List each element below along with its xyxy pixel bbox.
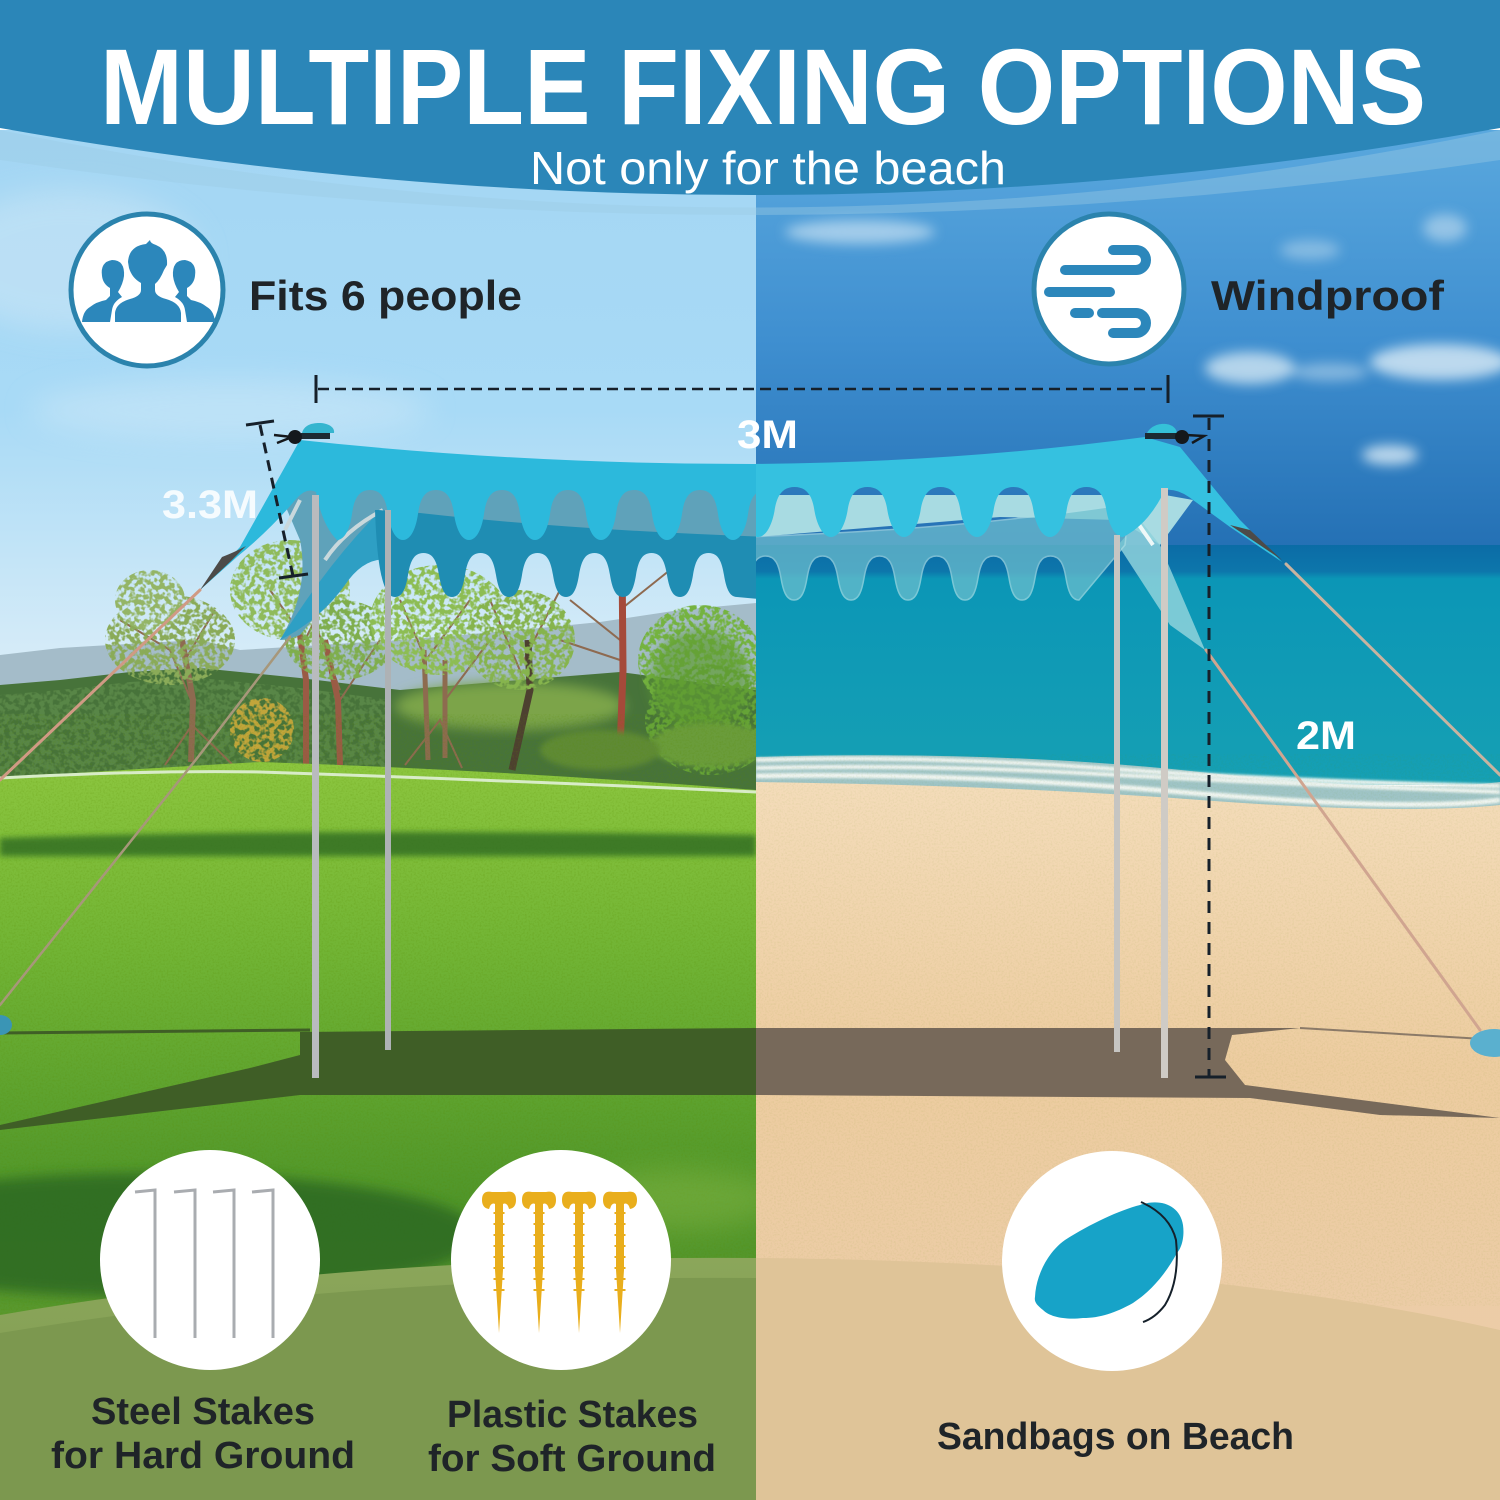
canopy top: grass half (200, 440, 799, 590)
canopy top: beach half (756, 437, 1282, 562)
subtitle: Not only for the beach (530, 142, 1006, 194)
label: 3M: 3M (737, 413, 798, 457)
accessory: plastic stakes (428, 1150, 716, 1480)
trees (80, 540, 775, 780)
tree shadow on grass (0, 832, 756, 856)
dimension: depth 3.3M (246, 421, 308, 578)
dimension: height 2M (1193, 416, 1226, 1077)
guy ropes (0, 564, 1500, 1030)
accessory: sandbag (937, 1151, 1294, 1458)
tent top fittings (274, 423, 1204, 444)
label: Sandbags on Beach (937, 1416, 1294, 1458)
feature: windproof (1034, 214, 1445, 364)
tent canopy (200, 437, 1282, 650)
left sky (0, 130, 756, 690)
icon: wind (1034, 214, 1184, 364)
panel: golf course scene (0, 130, 756, 1315)
canopy shadow on sand (756, 1028, 1500, 1118)
dimension: width 3M (316, 375, 1168, 403)
tent corner tips (200, 525, 1282, 590)
label: Fits 6 people (249, 272, 522, 319)
right sky (756, 130, 1500, 550)
surf (756, 755, 1500, 815)
canopy shadow on grass (0, 1028, 756, 1130)
bottom ground strip: left (0, 1258, 756, 1500)
label: for Soft Ground (428, 1438, 716, 1480)
sea (756, 545, 1500, 785)
sand (756, 782, 1500, 1330)
bottom ground strip: right (756, 1258, 1500, 1500)
feature: fits 6 people (71, 214, 522, 366)
canopy back and underside: beach half (737, 495, 1205, 650)
icon: people (71, 214, 223, 366)
accessory: steel stakes (51, 1150, 355, 1477)
label: Plastic Stakes (447, 1394, 698, 1436)
label: 2M: 2M (1296, 714, 1356, 758)
icon: sandbag (1035, 1202, 1183, 1322)
panel: beach scene (756, 130, 1500, 1500)
mountains (0, 603, 756, 690)
label: Windproof (1211, 272, 1445, 319)
title: MULTIPLE FIXING OPTIONS (100, 26, 1426, 147)
label: for Hard Ground (51, 1435, 355, 1477)
forest hill (0, 668, 756, 790)
canopy back and underside: grass half (280, 490, 756, 640)
icon: steel stakes (135, 1190, 273, 1338)
label: Steel Stakes (91, 1391, 315, 1433)
icon: plastic stakes (482, 1192, 637, 1333)
foliage (80, 540, 775, 780)
grass (0, 762, 756, 1315)
label: 3.3M: 3.3M (162, 483, 258, 527)
header band (0, 0, 1500, 215)
tent poles (312, 488, 1168, 1078)
